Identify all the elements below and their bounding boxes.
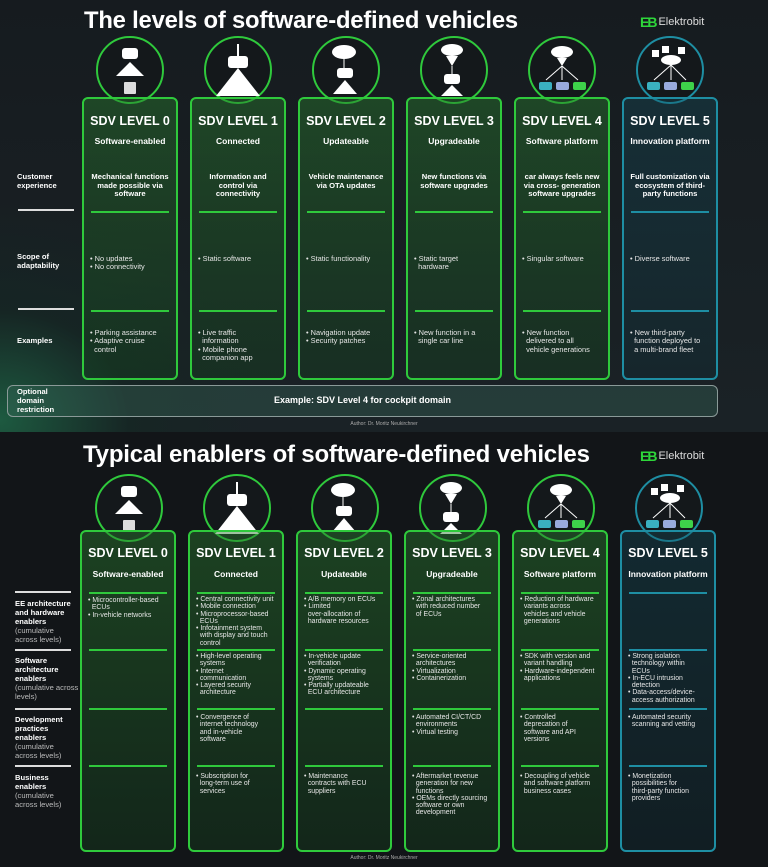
- card: enablers level 2: ECU architecture: [308, 689, 360, 696]
- card: enablers level 1: Connected: [214, 569, 258, 579]
- logo top: EB: [640, 14, 655, 30]
- card: enablers level 2: hardware resources: [308, 618, 369, 625]
- card: enablers level 1: systems: [200, 660, 225, 667]
- card: enablers level 5: technology within: [632, 660, 685, 667]
- row labels bottom: enablers: [15, 617, 46, 626]
- card: level 0: SDV LEVEL 0: [90, 114, 170, 128]
- card: enablers level 1: • High-level operating: [196, 653, 262, 660]
- row labels bottom: (cumulative: [15, 626, 54, 635]
- card: level 4: Software platform: [526, 136, 598, 146]
- card: level 2: SDV LEVEL 2: [306, 114, 386, 128]
- row labels bottom: Development: [15, 715, 63, 724]
- card: enablers level 1: • Convergence of: [196, 714, 249, 721]
- card: level 2: Updateable: [323, 136, 369, 146]
- card: enablers level 4: SDV LEVEL 4: [520, 546, 600, 560]
- card: enablers level 3: SDV LEVEL 3: [412, 546, 492, 560]
- card: level 0: control: [94, 345, 116, 354]
- card: enablers level 1: • Mobile connection: [196, 603, 256, 610]
- bottom section background: [0, 432, 768, 867]
- card: level 1: Information and control via connectivity: [209, 172, 267, 198]
- row labels bottom: across levels): [15, 800, 61, 809]
- card: level 3: SDV LEVEL 3: [414, 114, 494, 128]
- card: enablers level 5: ECUs: [632, 668, 650, 675]
- card: enablers level 3: • Aftermarket revenue: [412, 773, 478, 780]
- card: enablers level 1: • Central connectivity unit: [196, 596, 273, 603]
- row labels bottom: architecture: [15, 665, 58, 674]
- card: level 0: Software-enabled: [95, 136, 165, 146]
- row labels top: Scope of: [17, 252, 49, 261]
- card: level 1: SDV LEVEL 1: [198, 114, 278, 128]
- card: enablers level 1: • Internet: [196, 668, 224, 675]
- title: levels: The levels of software-defined vehicles: [84, 7, 518, 34]
- card: level 0: Mechanical functions made possible via software: [91, 172, 169, 198]
- card: enablers level 0: [80, 530, 176, 852]
- card: enablers level 5: • In-ECU intrusion: [628, 675, 683, 682]
- card: enablers level 3: • OEMs directly sourcing: [412, 795, 487, 802]
- card: level 4: • New function: [522, 328, 569, 337]
- card: enablers level 2: • Maintenance: [304, 773, 348, 780]
- card: enablers level 1: with display and touch: [200, 632, 268, 639]
- card: enablers level 1: SDV LEVEL 1: [196, 546, 276, 560]
- card: level 2: Vehicle maintenance via OTA updates: [309, 172, 383, 190]
- card: level 0: • Parking assistance: [90, 328, 157, 337]
- card: enablers level 5: access authorization: [632, 697, 695, 704]
- card: enablers level 3: Upgradeable: [426, 569, 478, 579]
- card: level 0: • No updates: [90, 254, 132, 263]
- card: enablers level 1: long-term use of: [200, 780, 250, 787]
- logo top: Elektrobit: [658, 16, 704, 28]
- card: enablers level 1: • Layered security: [196, 682, 251, 689]
- author bottom: Author: Dr. Moritz Neukirchner: [350, 855, 418, 861]
- card: enablers level 5: providers: [632, 795, 660, 802]
- card: enablers level 4: software and API: [524, 729, 576, 736]
- card: enablers level 5: scanning and vetting: [632, 721, 695, 728]
- card: enablers level 5: • Data-access/device-: [628, 689, 695, 696]
- card: enablers level 2: • A/B memory on ECUs: [304, 596, 375, 603]
- card: level 2: • Static functionality: [306, 254, 370, 263]
- card: enablers level 3: • Containerization: [412, 675, 466, 682]
- row labels bottom: and hardware: [15, 608, 64, 617]
- logo bottom: Elektrobit: [658, 450, 704, 462]
- optional domain restriction bar: restriction: [17, 405, 54, 414]
- card: enablers level 3: • Service-oriented: [412, 653, 466, 660]
- card: enablers level 4: deprecation of: [524, 721, 568, 728]
- card: enablers level 2: verification: [308, 660, 341, 667]
- row labels bottom: (cumulative: [15, 791, 54, 800]
- card: level 3: single car line: [418, 336, 463, 345]
- card: enablers level 4: versions: [524, 736, 550, 743]
- title: enablers: Typical enablers of software-defined vehicles: [83, 441, 590, 468]
- card: enablers level 4: generations: [524, 618, 560, 625]
- card: level 4: car always feels new via cross- generation software upgrades: [524, 172, 600, 198]
- card: enablers level 3: • Virtual testing: [412, 729, 458, 736]
- card: level 1: information: [202, 336, 239, 345]
- card: enablers level 5: • Strong isolation: [628, 653, 680, 660]
- icon circles bottom: [95, 474, 703, 542]
- card: enablers level 2: over-allocation of: [308, 611, 360, 618]
- card: level 3: • New function in a: [414, 328, 475, 337]
- top section background: [0, 0, 768, 432]
- card: level 2: • Navigation update: [306, 328, 370, 337]
- card: level 1: companion app: [202, 353, 253, 362]
- row labels bottom: enablers: [15, 733, 46, 742]
- card: enablers level 4: • Reduction of hardware: [520, 596, 594, 603]
- card: level 3: hardware: [418, 262, 449, 271]
- card: enablers level 5: SDV LEVEL 5: [628, 546, 708, 560]
- card: enablers level 2: SDV LEVEL 2: [304, 546, 384, 560]
- card: enablers level 4: variant handling: [524, 660, 572, 667]
- card: enablers level 4: applications: [524, 675, 560, 682]
- card: enablers level 3: architectures: [416, 660, 455, 667]
- card: enablers level 3: development: [416, 809, 455, 816]
- card: level 5: a multi-brand fleet: [634, 345, 693, 354]
- card: enablers level 2: • Limited: [304, 603, 331, 610]
- card: enablers level 4: vehicles and vehicle: [524, 611, 586, 618]
- row labels bottom: Software: [15, 656, 47, 665]
- card: level 5: • New third-party: [630, 328, 685, 337]
- card: enablers level 3: [404, 530, 500, 852]
- logo top: [640, 14, 704, 30]
- card: enablers level 4: • Decoupling of vehicle: [520, 773, 590, 780]
- card: level 0: • Adaptive cruise: [90, 336, 145, 345]
- card: level 3: • Static target: [414, 254, 458, 263]
- card: enablers level 1: services: [200, 788, 225, 795]
- row labels bottom: across levels): [15, 635, 61, 644]
- card: enablers level 1: software: [200, 736, 226, 743]
- card: enablers level 1: and in-vehicle: [200, 729, 242, 736]
- row labels top: adaptability: [17, 261, 59, 270]
- card: enablers level 3: of ECUs: [416, 611, 441, 618]
- card: level 5: SDV LEVEL 5: [630, 114, 710, 128]
- row labels bottom: Business: [15, 773, 49, 782]
- row labels bottom: across levels): [15, 751, 61, 760]
- card: enablers level 1: architecture: [200, 689, 236, 696]
- card: enablers level 3: software or own: [416, 802, 464, 809]
- card: enablers level 0: SDV LEVEL 0: [88, 546, 168, 560]
- optional domain restriction bar: Optional: [17, 387, 48, 396]
- card: level 1: • Live traffic: [198, 328, 236, 337]
- card: enablers level 5: • Automated security: [628, 714, 691, 721]
- card: level 5: [622, 97, 718, 380]
- row labels top: Examples: [17, 336, 52, 345]
- card: level 4: [514, 97, 610, 380]
- card: enablers level 1: • Subscription for: [196, 773, 248, 780]
- card: enablers level 3: generation for new: [416, 780, 473, 787]
- optional domain restriction bar: [7, 385, 718, 417]
- card: enablers level 4: variants across: [524, 603, 570, 610]
- card: enablers level 4: • SDK with version and: [520, 653, 590, 660]
- card: enablers level 5: detection: [632, 682, 660, 689]
- row labels bottom: levels): [15, 692, 37, 701]
- card: enablers level 2: [296, 530, 392, 852]
- card: level 3: [406, 97, 502, 380]
- card: enablers level 2: suppliers: [308, 788, 335, 795]
- card: enablers level 3: • Virtualization: [412, 668, 456, 675]
- card: level 2: • Security patches: [306, 336, 365, 345]
- card: enablers level 5: Innovation platform: [628, 569, 708, 579]
- card: enablers level 2: systems: [308, 675, 333, 682]
- card: enablers level 1: internet technology: [200, 721, 258, 728]
- card: enablers level 0: • Microcontroller-based: [88, 597, 159, 604]
- optional domain restriction bar: domain: [17, 396, 44, 405]
- row labels bottom: enablers: [15, 674, 46, 683]
- card: enablers level 2: • Dynamic operating: [304, 668, 366, 675]
- card: level 0: [82, 97, 178, 380]
- card: enablers level 1: control: [200, 640, 221, 647]
- card: level 4: delivered to all: [526, 336, 574, 345]
- row labels top: [17, 172, 74, 345]
- row labels bottom: enablers: [15, 782, 46, 791]
- card: level 3: Upgradeable: [428, 136, 480, 146]
- card: enablers level 5: third-party function: [632, 788, 689, 795]
- card: enablers level 3: functions: [416, 788, 443, 795]
- card: enablers level 0: ECUs: [92, 604, 110, 611]
- card: level 0: • No connectivity: [90, 262, 145, 271]
- card: enablers level 5: • Monetization: [628, 773, 671, 780]
- card: enablers level 5: [620, 530, 716, 852]
- card: enablers level 5: possibilities for: [632, 780, 677, 787]
- optional domain restriction bar: Example: SDV Level 4 for cockpit domain: [274, 395, 451, 405]
- author top: Author: Dr. Moritz Neukirchner: [350, 421, 418, 427]
- icon circles top: [96, 36, 704, 104]
- card: enablers level 1: ECUs: [200, 618, 218, 625]
- logo bottom: [640, 448, 704, 464]
- card: enablers level 3: environments: [416, 721, 457, 728]
- row labels bottom: EE architecture: [15, 599, 71, 608]
- row labels bottom: [15, 591, 78, 809]
- card: enablers level 2: • Partially updateable: [304, 682, 369, 689]
- row labels bottom: practices: [15, 724, 48, 733]
- card: level 1: [190, 97, 286, 380]
- card: enablers level 4: [512, 530, 608, 852]
- row labels bottom: (cumulative: [15, 742, 54, 751]
- row labels bottom: (cumulative across: [15, 683, 78, 692]
- logo bottom: EB: [640, 448, 655, 464]
- row labels top: Customer: [17, 172, 52, 181]
- card: enablers level 4: Software platform: [524, 569, 596, 579]
- card: level 5: • Diverse software: [630, 254, 690, 263]
- card: level 4: SDV LEVEL 4: [522, 114, 602, 128]
- card: enablers level 2: contracts with ECU: [308, 780, 366, 787]
- card: enablers level 4: and software platform: [524, 780, 590, 787]
- card: level 1: • Static software: [198, 254, 251, 263]
- card: enablers level 0: • In-vehicle networks: [88, 612, 151, 619]
- card: level 2: [298, 97, 394, 380]
- card: level 4: vehicle generations: [526, 345, 590, 354]
- card: level 5: function deployed to: [634, 336, 700, 345]
- card: level 3: New functions via software upgrades: [420, 172, 488, 190]
- card: enablers level 3: • Automated CI/CT/CD: [412, 714, 481, 721]
- card: level 5: Full customization via ecosystem of third-party functions: [630, 172, 710, 198]
- card: enablers level 4: • Hardware-independent: [520, 668, 594, 675]
- row labels top: experience: [17, 181, 57, 190]
- card: enablers level 2: • In-vehicle update: [304, 653, 361, 660]
- card: enablers level 1: communication: [200, 675, 246, 682]
- card: enablers level 3: • Zonal architectures: [412, 596, 475, 603]
- card: level 1: • Mobile phone: [198, 345, 247, 354]
- card: level 1: Connected: [216, 136, 260, 146]
- card: enablers level 1: [188, 530, 284, 852]
- card: enablers level 4: • Controlled: [520, 714, 556, 721]
- card: enablers level 1: • Microprocessor-based: [196, 611, 268, 618]
- card: level 4: • Singular software: [522, 254, 584, 263]
- card: enablers level 1: • Infotainment system: [196, 625, 262, 632]
- card: enablers level 0: Software-enabled: [93, 569, 163, 579]
- card: enablers level 4: business cases: [524, 788, 571, 795]
- card: level 5: Innovation platform: [630, 136, 710, 146]
- card: enablers level 2: Updateable: [321, 569, 367, 579]
- card: enablers level 3: with reduced number: [416, 603, 480, 610]
